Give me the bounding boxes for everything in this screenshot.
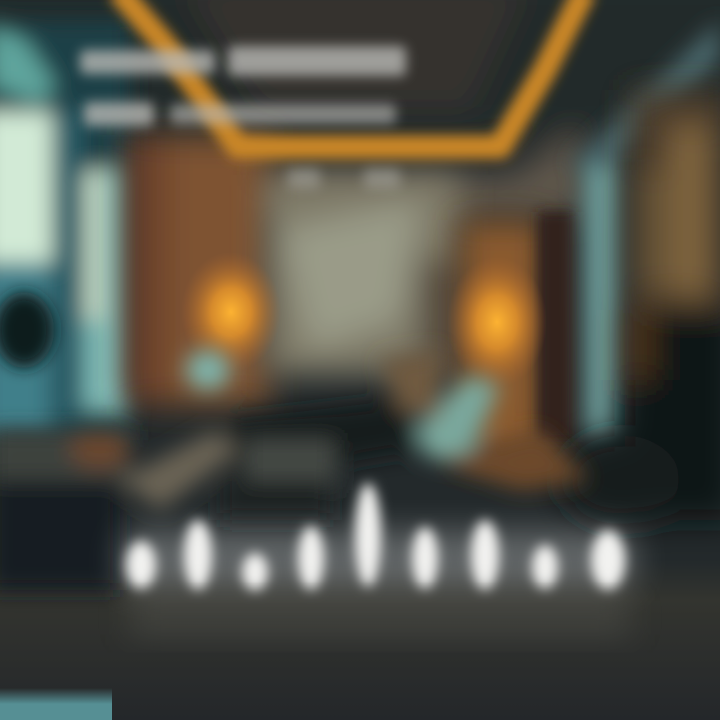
panel: brown wall left bbox=[125, 135, 270, 405]
icon: dark round object on left bbox=[0, 292, 54, 368]
panel: letter reflections on floor bbox=[130, 600, 630, 635]
panel: dark column right bbox=[538, 212, 576, 442]
panel: sofa and furniture bbox=[0, 350, 590, 590]
heading: blurred title bbox=[80, 46, 406, 188]
text block: blurred glowing letters bbox=[120, 483, 635, 591]
panel: left window wall bbox=[0, 20, 130, 440]
panel: brown wall right bbox=[460, 220, 545, 460]
ceiling bbox=[0, 0, 720, 215]
panel: centre wall bbox=[265, 175, 460, 380]
icon: right wall lamp bbox=[447, 256, 547, 388]
panel: floor bbox=[0, 560, 720, 720]
icon: left wall lamp bbox=[181, 252, 281, 372]
panel: far right wall bbox=[560, 90, 720, 525]
panel: teal column right bbox=[570, 20, 720, 440]
icon: orange ceiling light strip bbox=[118, 0, 585, 147]
panel: teal floor reflection bbox=[0, 688, 112, 720]
